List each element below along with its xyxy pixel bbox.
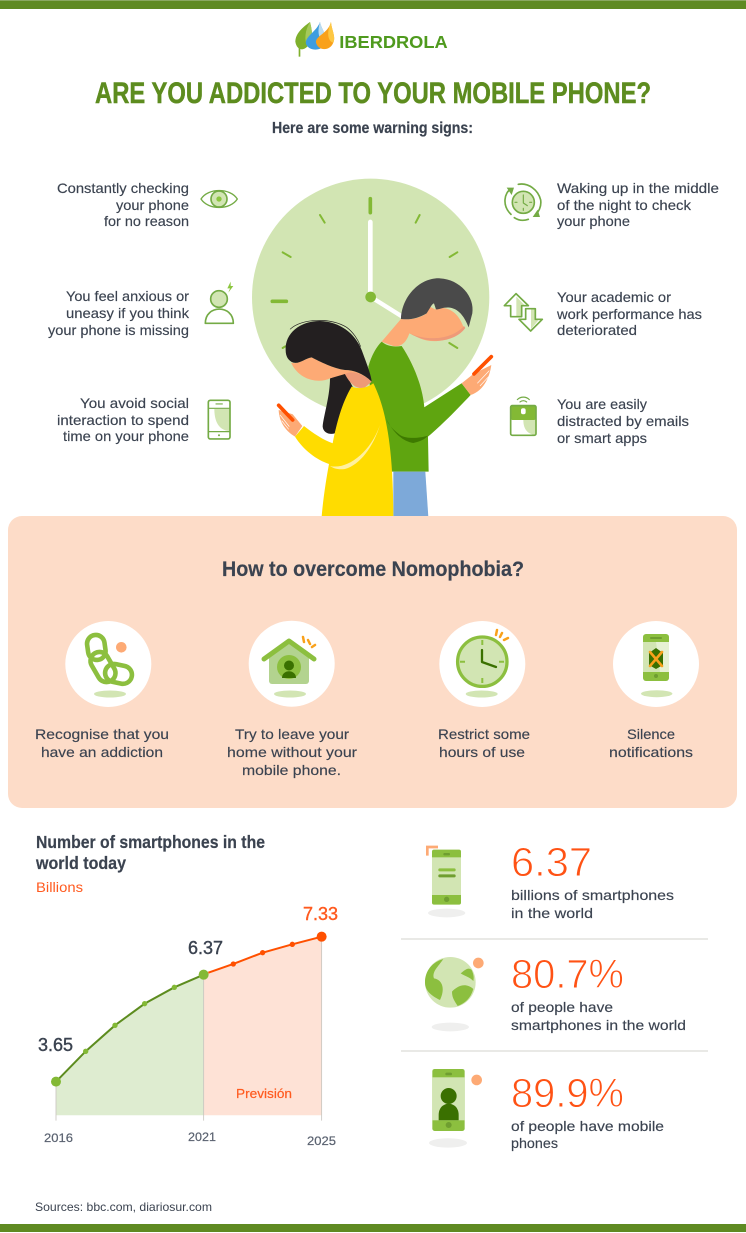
step: silence notifications: notifications: [609, 744, 693, 760]
top bar: [0, 0, 746, 9]
line: forecast: [208, 932, 327, 973]
warning sign: avoid social: You avoid social: [80, 395, 189, 411]
warning sign: constantly checking: for no reason: [104, 213, 189, 229]
chart labels: Previsión: [236, 1086, 292, 1101]
warning sign: waking up: Waking up in the middle: [557, 180, 719, 196]
warning sign: performance: work performance has: [556, 306, 702, 322]
stat: people with smartphones: smartphones in the world: [511, 1017, 686, 1033]
warning sign: avoid social: [57, 395, 189, 444]
warning sign: distracted: or smart apps: [557, 430, 647, 446]
warning sign: distracted: distracted by emails: [557, 413, 689, 429]
step: silence notifications: Silence: [627, 726, 675, 742]
step: restrict hours: Restrict some: [438, 726, 530, 742]
step: silence notifications: [609, 621, 699, 760]
chart labels: 2021: [188, 1130, 216, 1144]
step: restrict hours: [438, 621, 530, 760]
panel: how to overcome nomophobia: [8, 516, 737, 808]
chart heading: Number of smartphones in the: [36, 832, 265, 852]
step: restrict hours: hours of use: [439, 744, 525, 760]
chart heading: Billions: [36, 879, 83, 895]
warning sign: avoid social: time on your phone: [63, 428, 189, 444]
woman: [279, 320, 393, 517]
warning sign: distracted: You are easily: [557, 396, 647, 412]
warning sign: waking up: your phone: [557, 213, 630, 229]
clock face: [252, 179, 489, 416]
step: recognise: [35, 621, 169, 760]
stat: smartphones in the world: [427, 839, 674, 921]
chart labels: 2025: [307, 1134, 336, 1148]
stat: people with smartphones: 80.7%: [511, 951, 624, 997]
icon: globe: [425, 957, 484, 1031]
sources: Sources: bbc.com, diariosur.com: [35, 1200, 212, 1214]
stat: smartphones in the world: in the world: [511, 905, 593, 921]
icon: eye: [201, 190, 237, 207]
warning sign: constantly checking: Constantly checking: [57, 180, 189, 196]
man: [368, 278, 491, 517]
panel heading: How to overcome Nomophobia?: [222, 557, 524, 581]
warning sign: constantly checking: your phone: [116, 197, 189, 213]
stat: people with mobile phones: [429, 1069, 664, 1151]
step: recognise: Recognise that you: [35, 726, 169, 742]
icon: smartphone: [427, 847, 465, 917]
stat: people with mobile phones: phones: [511, 1135, 558, 1151]
chart heading: world today: [35, 853, 126, 873]
warning sign: performance: deteriorated: [557, 322, 637, 338]
icon: phone with person: [429, 1069, 482, 1148]
warning sign: waking up: [557, 180, 719, 229]
bottom bar: [0, 1224, 746, 1232]
chart labels: [38, 904, 338, 1148]
clock marks: [272, 199, 457, 348]
stat: smartphones in the world: 6.37: [511, 839, 592, 885]
clock hands: [370, 222, 403, 317]
warning sign: distracted: [557, 396, 689, 446]
warning sign: avoid social: interaction to spend: [57, 412, 189, 428]
step: leave home: home without your: [227, 744, 357, 760]
chart labels: 3.65: [38, 1035, 73, 1055]
stat: people with mobile phones: of people have mobile: [511, 1118, 664, 1134]
step: leave home: [227, 621, 357, 778]
chart labels: 7.33: [303, 904, 338, 924]
icon: clock with arrows: [505, 184, 541, 220]
warning sign: waking up: of the night to check: [557, 197, 692, 213]
step: recognise: have an addiction: [41, 744, 163, 760]
chart heading: [35, 832, 265, 895]
step: leave home: mobile phone.: [242, 762, 341, 778]
chart labels: 2016: [44, 1131, 73, 1145]
line: historic: [51, 970, 209, 1087]
warning sign: constantly checking: [57, 180, 189, 229]
warning sign: performance: Your academic or: [557, 289, 671, 305]
warning sign: anxious: uneasy if you think: [66, 305, 190, 321]
illustration: clock with man and woman: [252, 179, 491, 517]
warning sign: performance: [556, 289, 702, 338]
stat: people with smartphones: [425, 951, 686, 1033]
icon: anxious person: [205, 282, 233, 323]
stat: smartphones in the world: billions of smartphones: [511, 887, 674, 903]
icon: smart device with wifi: [511, 397, 536, 435]
chart labels: 6.37: [188, 938, 223, 958]
icon: up and down arrows: [504, 294, 542, 331]
logo: Iberdrola: IBERDROLA: [339, 32, 448, 52]
icon: phone: [208, 400, 230, 439]
stat: people with smartphones: of people have: [511, 999, 613, 1015]
warning sign: anxious: You feel anxious or: [66, 288, 189, 304]
area: forecast: [204, 937, 322, 1115]
stat: people with mobile phones: 89.9%: [511, 1070, 624, 1116]
subtitle: Here are some warning signs:: [272, 120, 473, 137]
warning sign: anxious: [48, 288, 190, 338]
warning sign: anxious: your phone is missing: [48, 322, 189, 338]
step: leave home: Try to leave your: [235, 726, 349, 742]
line chart: number of smartphones: [51, 932, 327, 1121]
logo: Iberdrola: [295, 22, 448, 57]
area: historic: [56, 975, 204, 1115]
